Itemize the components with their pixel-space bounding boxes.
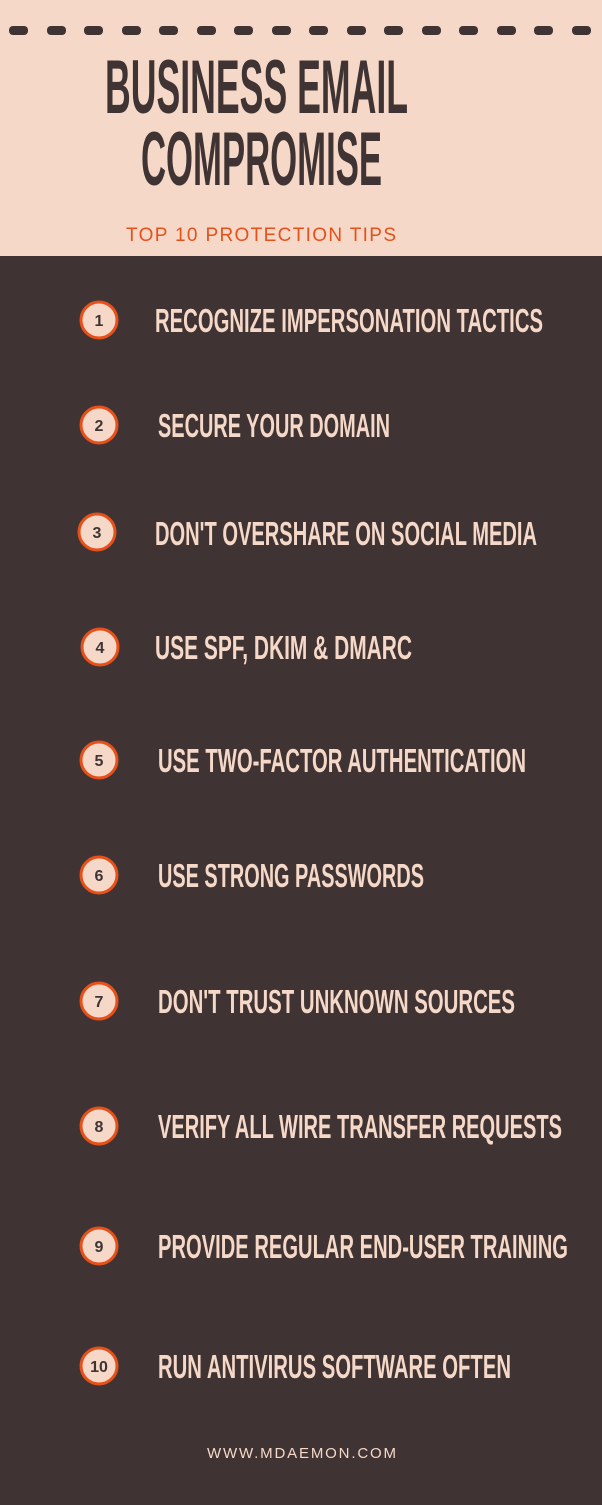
tip 4 [82,629,412,666]
tip 4: USE SPF, DKIM & DMARC [155,629,412,666]
tip 6: 6 [95,868,104,885]
tip 2 [81,407,390,444]
tip 4: 4 [96,640,105,657]
tip 9: 9 [95,1239,104,1256]
subtitle: TOP 10 PROTECTION TIPS [126,225,396,246]
dashed line [9,26,591,35]
tip 1: 1 [95,313,104,330]
title [105,45,408,202]
tip 5: 5 [95,753,104,770]
tip 7: 7 [95,994,104,1011]
tip list [79,302,568,1385]
tip 2: 2 [95,418,104,435]
tip 6: USE STRONG PASSWORDS [158,857,424,894]
tip 6 [81,857,424,894]
header panel [0,0,602,256]
tip 3: 3 [93,525,102,542]
tip 7 [81,983,515,1020]
tip 2: SECURE YOUR DOMAIN [158,407,390,444]
tip 10 [81,1348,511,1385]
tip 10: 10 [90,1359,108,1376]
tip 8: 8 [95,1119,104,1136]
footer url: WWW.MDAEMON.COM [207,1445,396,1462]
